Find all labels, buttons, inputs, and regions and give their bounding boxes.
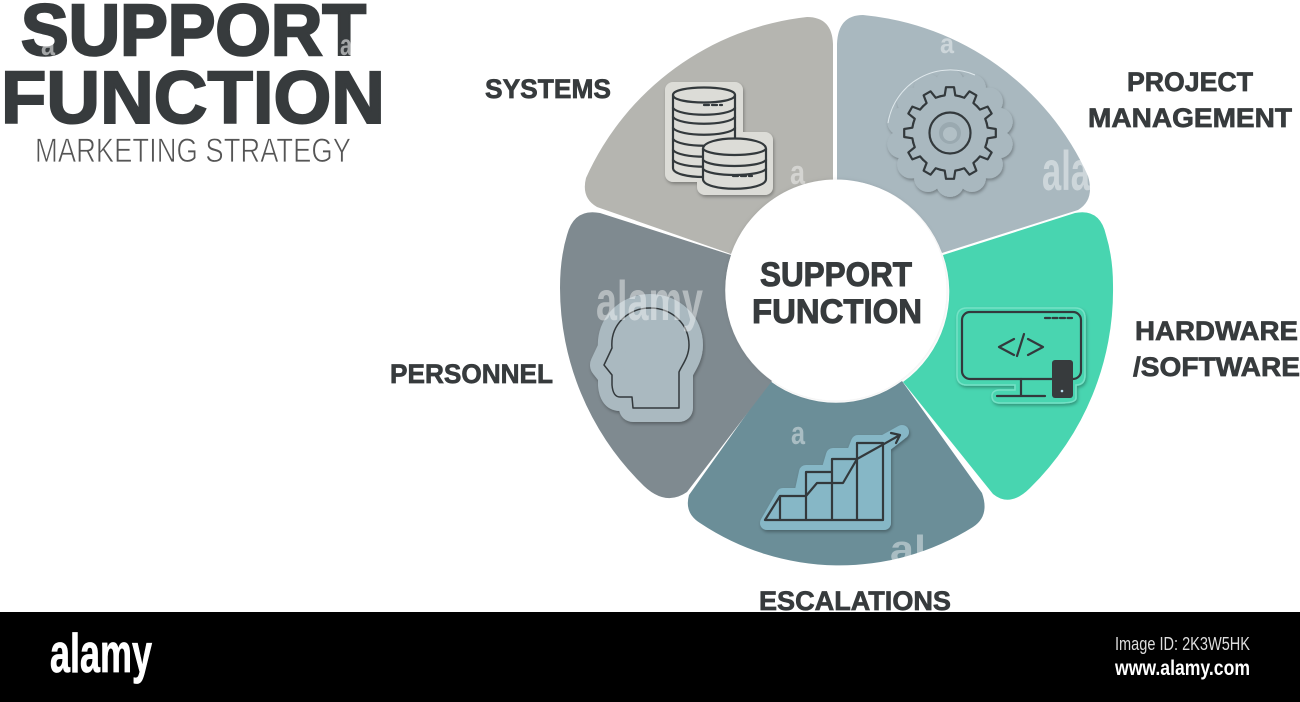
label: hardware/software: /SOFTWARE [1133, 352, 1300, 382]
label: project management: PROJECT [1127, 67, 1253, 97]
icon: database stacks [673, 88, 766, 189]
label: systems: SYSTEMS [485, 74, 611, 104]
website: www.alamy.com [1114, 657, 1250, 680]
label: project management: MANAGEMENT [1088, 103, 1293, 133]
panel: project management [837, 15, 1090, 253]
watermarks: a [791, 415, 805, 451]
segment: personnel [560, 212, 772, 498]
image id: Image ID: 2K3W5HK [1115, 634, 1250, 654]
footer logo: alamy [50, 622, 152, 684]
title: support function [1, 0, 385, 139]
label: hardware/software: HARDWARE [1135, 316, 1298, 346]
subtitle: marketing strategy: MARKETING STRATEGY [35, 132, 351, 170]
watermarks: ala [1042, 139, 1091, 202]
title block [1, 0, 385, 170]
segment: project management [837, 15, 1090, 253]
panel: systems [585, 17, 833, 254]
watermarks: a [940, 28, 954, 59]
icon: growth chart [765, 432, 902, 523]
panel: personnel [560, 212, 772, 498]
center label: FUNCTION [752, 293, 922, 331]
icon: gear [884, 69, 1016, 197]
panel: escalations [688, 381, 985, 565]
footer bar [0, 612, 1300, 702]
segment: systems [585, 17, 833, 254]
watermarks: al [890, 529, 926, 571]
watermarks: alamy [596, 269, 703, 332]
watermarks: a [340, 29, 352, 62]
segment: hardware/software [903, 212, 1113, 500]
center circle [726, 180, 946, 400]
panel: hardware/software [903, 212, 1113, 500]
icon: computer [957, 308, 1085, 403]
label: personnel: PERSONNEL [390, 359, 553, 389]
watermarks: a [41, 29, 55, 62]
center label: SUPPORT [760, 256, 912, 294]
title: support function: FUNCTION [1, 56, 385, 139]
segment: escalations [688, 381, 985, 565]
label: escalations: ESCALATIONS [759, 586, 951, 616]
watermarks [41, 28, 1091, 571]
watermarks: a [790, 154, 806, 192]
icon: head [604, 308, 689, 408]
